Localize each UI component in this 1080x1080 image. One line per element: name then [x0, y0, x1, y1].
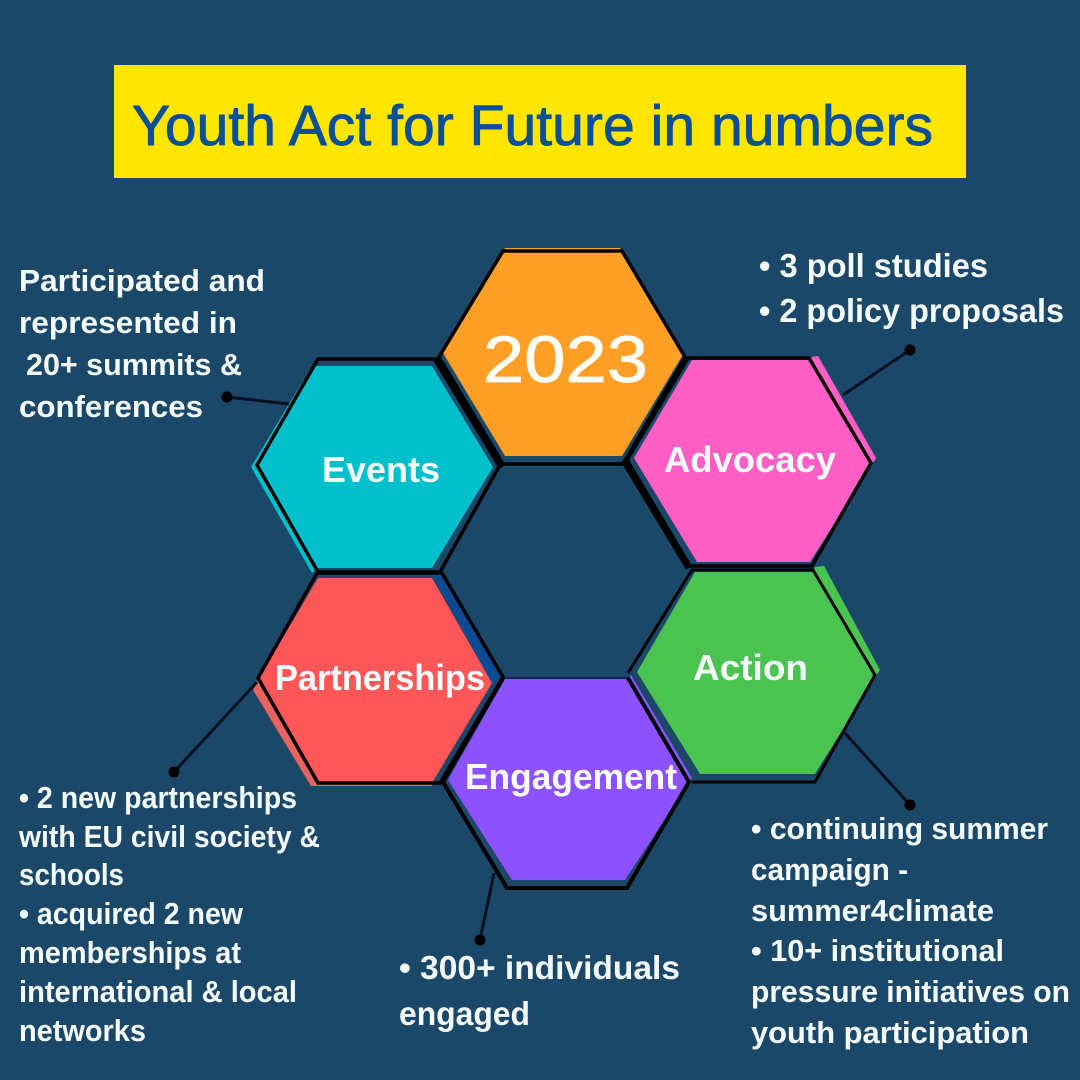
text block: Partnerships: schools [19, 857, 124, 892]
text block: Action: campaign - [751, 852, 908, 887]
hexagon: Action: Action [693, 647, 808, 688]
text block: Events: Participated and [19, 263, 265, 298]
text block: Advocacy [759, 247, 1064, 329]
text block: Partnerships: • 2 new partnerships [19, 780, 297, 815]
connector: Partnerships [168, 682, 257, 778]
connector: Action [843, 731, 916, 810]
title banner [114, 65, 966, 178]
text block: Action: • continuing summer [751, 811, 1048, 846]
hexagon: Advocacy: Advocacy [664, 439, 836, 480]
hexagon: Partnerships [253, 572, 503, 786]
text block: Partnerships: international & local [19, 974, 297, 1009]
hexagon: Action [628, 566, 880, 782]
text block: Action [751, 811, 1070, 1050]
hexagon: Partnerships: Partnerships [275, 657, 485, 698]
connector: Events [222, 392, 289, 404]
text block: Partnerships [18, 780, 320, 1048]
text block: Partnerships: • acquired 2 new [19, 896, 244, 931]
text block: Partnerships: memberships at [19, 935, 241, 970]
text block: Advocacy: • 3 poll studies [759, 247, 988, 284]
text block: Events: conferences [19, 389, 203, 424]
text block: Events: 20+ summits & [26, 347, 242, 382]
connector: Engagement [474, 873, 494, 946]
text block: Action: • 10+ institutional [751, 933, 1004, 968]
text block: Events [19, 263, 265, 424]
hexagon: Events [251, 359, 500, 573]
hexagon: Engagement: Engagement [465, 756, 677, 797]
connector: Advocacy [843, 344, 916, 395]
text block: Action: youth participation [751, 1015, 1029, 1050]
text block: Partnerships: with EU civil society & [18, 819, 320, 854]
text block: Partnerships: networks [19, 1013, 146, 1048]
hexagon: Events: Events [322, 449, 440, 490]
title banner: Youth Act for Future in numbers [132, 94, 933, 158]
hexagon: Advocacy [624, 356, 876, 568]
hexagon: 2023: 2023 [483, 322, 648, 396]
text block: Events: represented in [19, 305, 237, 340]
hexagon: Engagement [443, 675, 692, 888]
text block: Engagement: engaged [399, 995, 530, 1032]
text block: Engagement: • 300+ individuals [399, 949, 680, 986]
hexagon: 2023 [436, 248, 685, 467]
text block: Action: summer4climate [751, 893, 994, 928]
text block: Action: pressure initiatives on [751, 974, 1070, 1009]
text block: Advocacy: • 2 policy proposals [759, 292, 1064, 329]
text block: Engagement [399, 949, 680, 1032]
